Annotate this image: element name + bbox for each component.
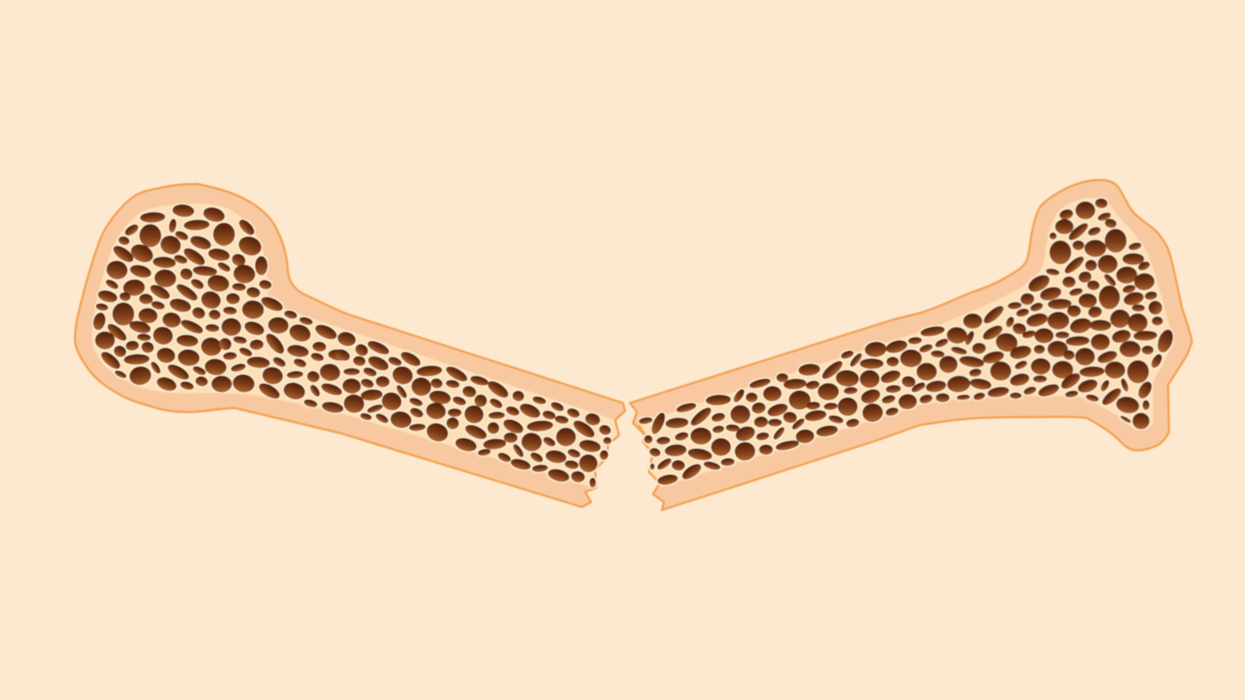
right bone fragment <box>630 180 1192 510</box>
left bone fragment <box>75 184 625 507</box>
pores: right bone shaft <box>639 337 925 485</box>
left bone cortex <box>75 184 625 507</box>
left bone pores <box>92 204 611 487</box>
left fracture edge <box>595 420 619 488</box>
pores: right bone head <box>917 199 1175 428</box>
right bone pores <box>639 199 1175 485</box>
pores: left bone head <box>92 204 348 413</box>
right bone cortex <box>630 180 1192 510</box>
right bone marrow <box>640 198 1173 487</box>
pores: left bone shaft <box>335 331 611 487</box>
right fracture edge <box>638 423 660 483</box>
left bone marrow <box>92 204 619 488</box>
